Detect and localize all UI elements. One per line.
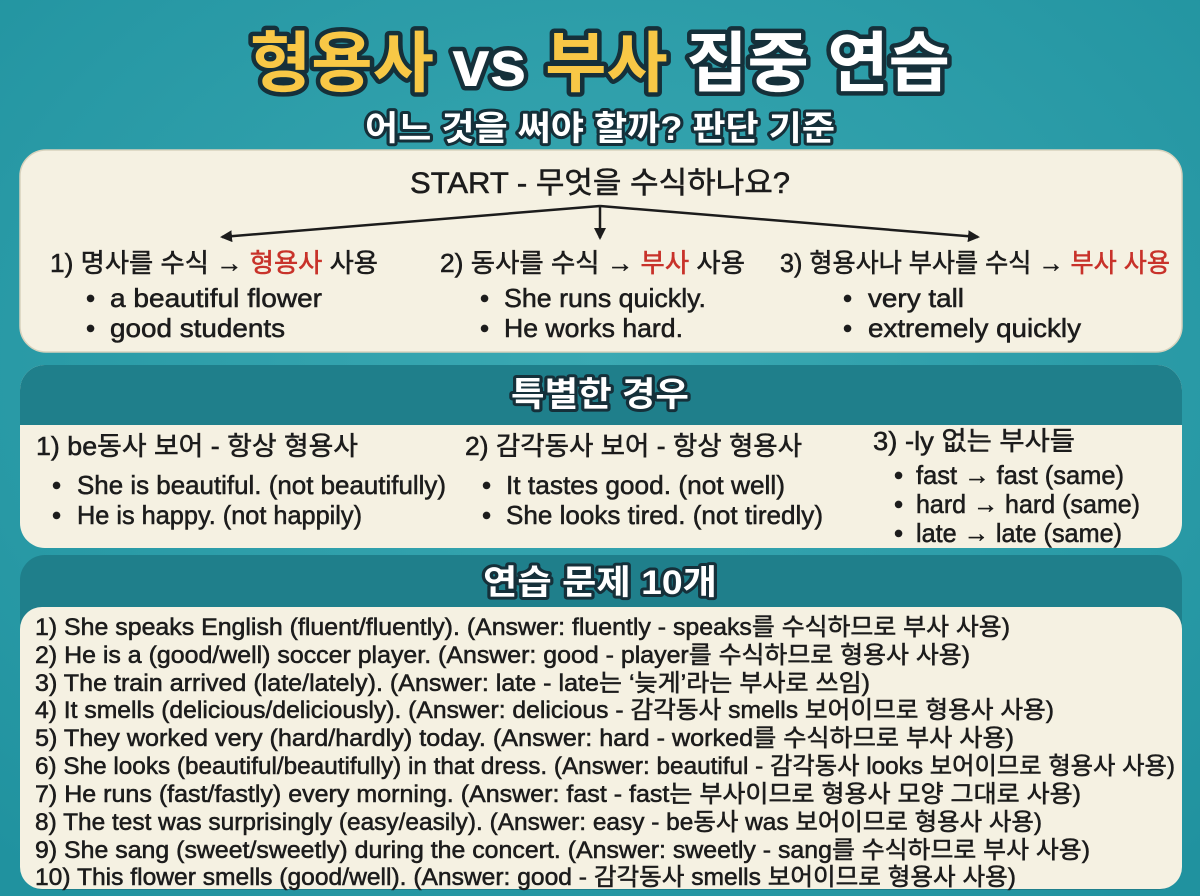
practice list: 5) They worked very (hard/hardly) today. (Answer: hard - worked를 수식하므로 부사 사용): [35, 725, 1014, 752]
panel: decision flow: [20, 150, 1182, 352]
branch 1: noun: [50, 248, 378, 343]
arrows: branches: [222, 206, 978, 238]
title: 형용사 vs 부사 집중 연습: [250, 26, 950, 100]
case 3: 3) -ly 없는 부사들: [873, 426, 1075, 456]
practice list: 4) It smells (delicious/deliciously). (Answer: delicious - 감각동사 smells 보어이므로 형용사 사용): [35, 697, 1054, 724]
case 2: She looks tired. (not tiredly): [506, 500, 823, 530]
case 3: late → late (same): [916, 518, 1122, 548]
branch 1: noun: •: [86, 313, 95, 343]
branch 3: adj/adv: •: [843, 313, 852, 343]
practice list: 8) The test was surprisingly (easy/easily). (Answer: easy - be동사 was 보어이므로 형용사 사용): [35, 809, 1042, 836]
branch 1: noun: a beautiful flower: [110, 283, 322, 313]
case 2: [465, 431, 823, 530]
branch 2: verb: 2) 동사를 수식 → 부사 사용: [440, 248, 745, 278]
practice list: 6) She looks (beautiful/beautifully) in that dress. (Answer: beautiful - 감각동사 looks 보어이므로 형용사 사용): [35, 753, 1175, 780]
heading: special cases: 특별한 경우: [511, 376, 689, 414]
branch 2: verb: [440, 248, 745, 343]
case 2: 2) 감각동사 보어 - 항상 형용사: [465, 431, 802, 461]
case 1: •: [52, 470, 61, 500]
branch 3: adj/adv: 3) 형용사나 부사를 수식 → 부사 사용: [780, 248, 1170, 278]
case 2: •: [482, 470, 491, 500]
practice list: 1) She speaks English (fluent/fluently). (Answer: fluently - speaks를 수식하므로 부사 사용): [35, 614, 1010, 641]
branch 2: verb: •: [480, 283, 489, 313]
case 1: 1) be동사 보어 - 항상 형용사: [36, 431, 358, 461]
start question: START - 무엇을 수식하나요?: [410, 167, 790, 200]
branch 2: verb: She runs quickly.: [504, 283, 706, 313]
practice list: 3) The train arrived (late/lately). (Answer: late - late는 ‘늦게’라는 부사로 쓰임): [35, 670, 870, 697]
branch 2: verb: •: [480, 313, 489, 343]
case 3: •: [894, 518, 903, 548]
case 2: •: [482, 500, 491, 530]
case 3: fast → fast (same): [916, 460, 1124, 490]
heading: practice: 연습 문제 10개: [483, 564, 717, 602]
case 2: It tastes good. (not well): [506, 470, 785, 500]
case 3: •: [894, 460, 903, 490]
case 1: He is happy. (not happily): [77, 500, 362, 530]
practice list: 10) This flower smells (good/well). (Answer: good - 감각동사 smells 보어이므로 형용사 사용): [35, 864, 1016, 891]
panel: special cases: [20, 365, 1182, 548]
subtitle: 어느 것을 써야 할까? 판단 기준: [365, 110, 835, 148]
case 3: •: [894, 489, 903, 519]
case 1: •: [52, 500, 61, 530]
panel: practice questions: [20, 555, 1182, 891]
branch 2: verb: He works hard.: [504, 313, 683, 343]
branch 3: adj/adv: [780, 248, 1170, 343]
practice list: [35, 614, 1175, 891]
case 3: hard → hard (same): [916, 489, 1140, 519]
practice list: 9) She sang (sweet/sweetly) during the concert. (Answer: sweetly - sang를 수식하므로 부사 사용): [35, 837, 1090, 864]
branch 3: adj/adv: extremely quickly: [868, 313, 1081, 343]
practice list: 2) He is a (good/well) soccer player. (Answer: good - player를 수식하므로 형용사 사용): [35, 642, 970, 669]
case 1: She is beautiful. (not beautifully): [77, 470, 446, 500]
branch 3: adj/adv: •: [843, 283, 852, 313]
branch 3: adj/adv: very tall: [868, 283, 964, 313]
branch 1: noun: good students: [110, 313, 285, 343]
branch 1: noun: •: [86, 283, 95, 313]
case 3: [873, 426, 1140, 548]
practice list: 7) He runs (fast/fastly) every morning. (Answer: fast - fast는 부사이므로 형용사 모양 그대로 사용): [35, 781, 1081, 808]
case 1: [36, 431, 446, 530]
branch 1: noun: 1) 명사를 수식 → 형용사 사용: [50, 248, 378, 278]
